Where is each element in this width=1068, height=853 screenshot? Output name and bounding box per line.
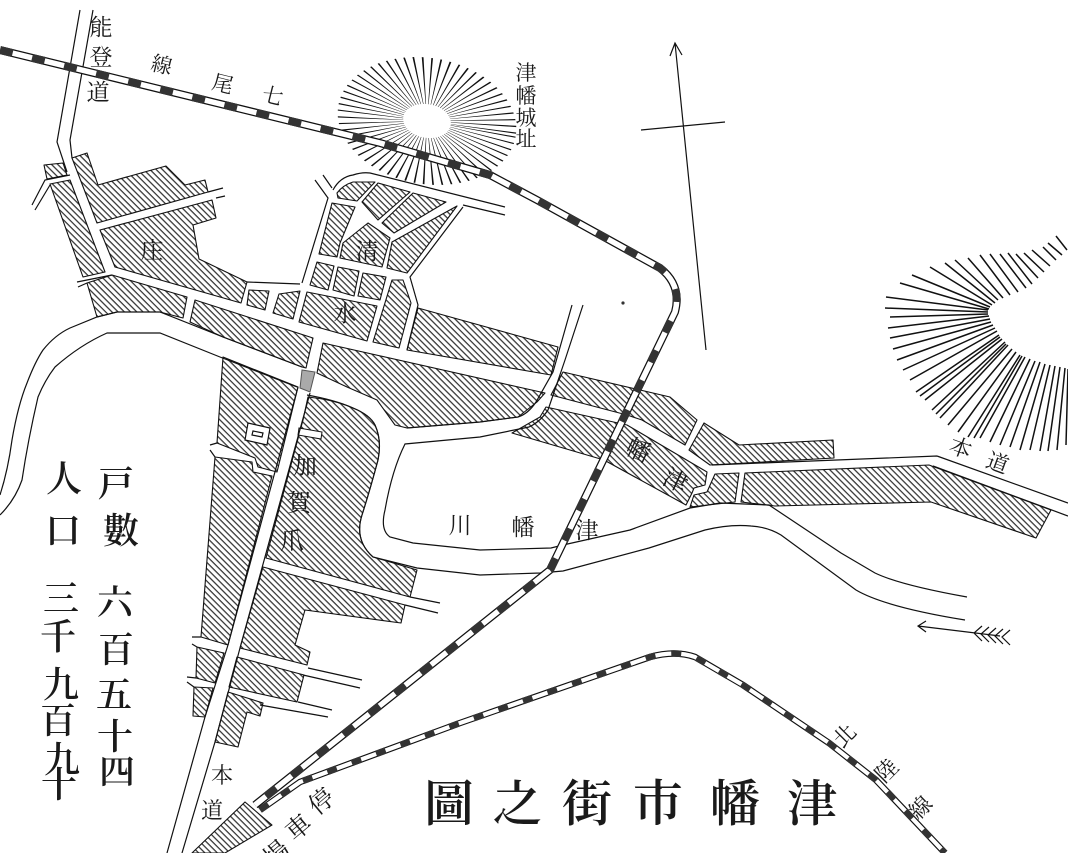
- label: Shimizu: [334, 239, 378, 326]
- population label and figure: 九: [44, 740, 80, 780]
- label: Tsubata castle ruins: 幡: [516, 84, 536, 108]
- label: Tsubata River: 川: [448, 513, 472, 538]
- label: Noto road: [86, 15, 112, 105]
- title: 圖: [424, 776, 474, 832]
- label: Kagatsume: 爪: [280, 528, 304, 555]
- label: Tsubata on road: 津: [659, 464, 692, 499]
- label: Sho: 庄: [140, 238, 164, 263]
- households label and figure: 六: [97, 583, 135, 623]
- population label and figure: 九: [43, 665, 79, 705]
- label: Hokuriku line: 陸: [870, 754, 903, 787]
- label: Tsubata River: 幡: [512, 515, 534, 540]
- population label and figure: 千: [40, 617, 76, 657]
- title: [424, 776, 837, 832]
- households label and figure: 數: [103, 511, 139, 551]
- title: 街: [562, 776, 612, 832]
- label: Shimizu: 水: [334, 301, 356, 326]
- label: Hokuriku line: 線: [904, 791, 937, 824]
- north arrow: [641, 43, 725, 350]
- population label and figure: [40, 459, 82, 805]
- label: east main road: 道: [983, 447, 1012, 478]
- side road notch: [298, 428, 322, 439]
- label: Nanao line: 七: [260, 82, 286, 110]
- title: 幡: [710, 776, 760, 832]
- population label and figure: 口: [45, 511, 81, 551]
- label: Tsubata castle ruins: [516, 61, 536, 151]
- map dot: [621, 301, 625, 305]
- label: Tsubata castle ruins: 址: [516, 127, 536, 151]
- label: station: 車: [280, 809, 317, 847]
- label: Noto road: 道: [86, 80, 110, 105]
- population label and figure: 三: [43, 579, 79, 619]
- label: Noto road: 能: [90, 15, 112, 40]
- title: 市: [633, 776, 683, 832]
- label: Kagatsume: 加: [293, 453, 317, 480]
- label: east main road: 本: [946, 432, 975, 463]
- label: Kagatsume: 賀: [287, 490, 313, 517]
- building: square enclosure: [245, 423, 270, 445]
- label: Nanao line: 線: [149, 51, 175, 79]
- label: Nanao line: 尾: [210, 70, 236, 98]
- label: Tsubata castle ruins: 城: [516, 106, 536, 130]
- households label and figure: [96, 464, 139, 792]
- households label and figure: 百: [98, 630, 134, 670]
- label: south main road: 本: [211, 763, 233, 788]
- label: Shimizu: 清: [356, 239, 378, 264]
- label: Tsubata on road: 幡: [622, 434, 655, 469]
- hill: Tsubata castle ruins hachures: [364, 72, 490, 170]
- label: station: [258, 783, 340, 853]
- railway: Hokuriku line: [260, 654, 945, 853]
- label: east main road: [946, 432, 1012, 478]
- households label and figure: 四: [99, 752, 135, 792]
- label: south main road: [201, 763, 233, 823]
- hatched town blocks: Kagatsume district: [192, 357, 417, 853]
- population label and figure: 百: [40, 701, 76, 741]
- households label and figure: 戸: [98, 464, 134, 504]
- label: Kagatsume: [280, 453, 317, 555]
- population label and figure: 十: [41, 765, 77, 805]
- label: Hokuriku line: [828, 719, 937, 824]
- railway: Nanao line: [0, 50, 677, 805]
- hatched town blocks: Sho and Shimizu districts: [44, 153, 457, 368]
- hill: eastern hachures: [885, 236, 1068, 451]
- hatched town blocks: main east road: [317, 308, 1051, 538]
- population label and figure: 人: [46, 459, 82, 499]
- title: 津: [787, 776, 837, 832]
- title: 之: [492, 776, 542, 832]
- label: Tsubata castle ruins: 津: [516, 61, 536, 85]
- label: Tsubata River: [448, 513, 598, 543]
- households label and figure: 十: [97, 717, 133, 757]
- label: Hokuriku line: 北: [828, 719, 861, 752]
- label: Nanao line: [149, 51, 286, 110]
- label: Noto road: 登: [90, 45, 112, 70]
- label: station: 停: [303, 783, 340, 821]
- wind arrow: [918, 621, 1010, 645]
- label: south main road: 道: [201, 798, 223, 823]
- bridge: [300, 370, 315, 392]
- label: Tsubata River: 津: [576, 518, 598, 543]
- river: Tsubata River: [0, 305, 967, 620]
- label: Tsubata on road: [622, 434, 692, 499]
- households label and figure: 五: [96, 675, 132, 715]
